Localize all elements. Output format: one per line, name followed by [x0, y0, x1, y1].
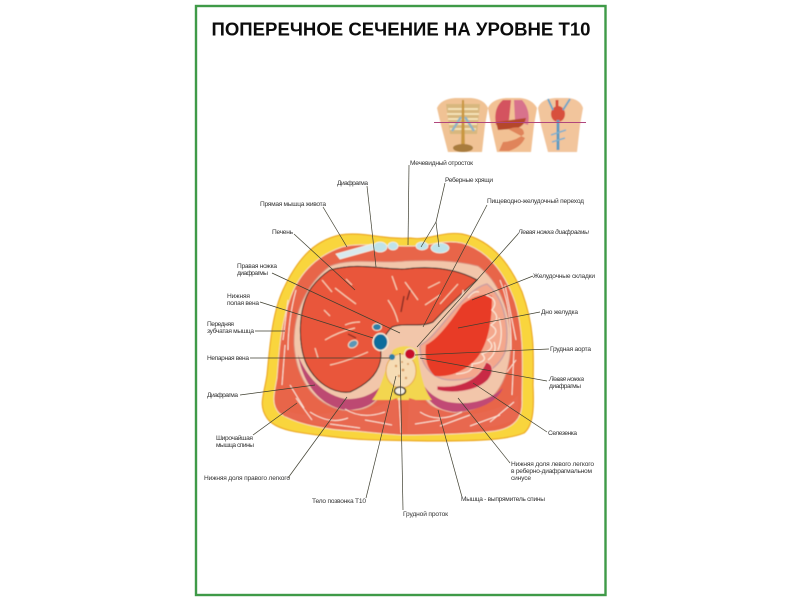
- anatomical labels: Тело позвонка Т10: [312, 498, 366, 505]
- anatomical labels: Печень: [272, 229, 294, 236]
- retroperitoneal yellow tissue: [372, 346, 432, 400]
- anatomical labels: в реберно-диафрагмальном: [511, 467, 592, 475]
- anatomical labels: Непарная вена: [207, 355, 249, 362]
- anatomical labels: Правая ножка: [237, 263, 277, 270]
- vertebral body T10: [386, 354, 416, 388]
- anatomical labels: Прямая мышца живота: [260, 201, 326, 208]
- liver: [300, 266, 477, 392]
- anatomical labels: Мышца - выпрямитель спины: [461, 496, 545, 503]
- torso: organs: [488, 98, 537, 152]
- anatomical labels: синусе: [511, 475, 531, 482]
- anatomical labels: зубчатая мышца: [207, 327, 254, 335]
- stomach wall: [420, 284, 507, 380]
- anatomical labels: Нижняя доля левого легкого: [511, 461, 594, 468]
- leader lines: [240, 165, 549, 510]
- azygos vein: [389, 354, 395, 360]
- anatomical labels: Селезенка: [548, 430, 577, 437]
- rib cartilages: [336, 242, 449, 259]
- cross-section anatomy: [262, 233, 533, 441]
- anatomical labels: Диафрагма: [207, 392, 238, 399]
- level line: [434, 122, 586, 124]
- spinal canal: [394, 387, 406, 395]
- torso: skeleton: [437, 98, 488, 152]
- anatomical labels: Левая ножка диафрагмы: [517, 228, 589, 236]
- stomach lumen: [425, 295, 492, 376]
- inferior vena cava: [373, 334, 388, 350]
- gastric folds: [456, 290, 501, 374]
- anatomical labels: Грудной проток: [403, 510, 448, 518]
- anatomical labels: Пищеводно-желудочный переход: [487, 197, 584, 205]
- torso: vessels: [538, 98, 583, 152]
- anatomical labels: Дно желудка: [541, 309, 578, 316]
- anatomical labels: Левая ножка: [548, 376, 584, 383]
- pale inner wall: [294, 261, 511, 413]
- anatomical labels: Передняя: [207, 321, 234, 328]
- muscle fascia: [282, 280, 516, 433]
- anatomical labels: Широчайшая: [216, 434, 253, 442]
- anatomical labels: Нижняя: [227, 293, 250, 300]
- left lung recess: [420, 378, 503, 412]
- anatomical labels: Нижняя доля правого легкого: [204, 475, 290, 482]
- anatomical labels: Грудная аорта: [550, 346, 591, 353]
- spleen: [437, 362, 492, 392]
- title: ПОПЕРЕЧНОЕ СЕЧЕНИЕ НА УРОВНЕ T10: [212, 20, 590, 40]
- back muscles: [283, 398, 399, 433]
- anatomical labels: Реберные хрящи: [445, 176, 493, 184]
- anatomical labels: Мечевидный отросток: [410, 159, 473, 167]
- anatomical labels: Диафрагма: [337, 180, 368, 187]
- anatomical labels: [204, 159, 595, 518]
- aorta: [404, 348, 416, 360]
- anatomical labels: мышца спины: [216, 442, 254, 449]
- locator torsos: [437, 98, 583, 152]
- liver vessels: [315, 276, 458, 365]
- poster frame: [196, 6, 606, 595]
- right lung recess: [298, 355, 387, 410]
- anatomical labels: полая вена: [227, 300, 259, 307]
- anatomical labels: диафрагмы: [549, 383, 581, 390]
- anatomical labels: диафрагмы: [237, 270, 268, 277]
- muscle wall: [274, 242, 522, 435]
- anatomical labels: Желудочные складки: [533, 273, 595, 280]
- subcutaneous fat: [262, 233, 533, 441]
- hepatic vessels: [347, 338, 359, 350]
